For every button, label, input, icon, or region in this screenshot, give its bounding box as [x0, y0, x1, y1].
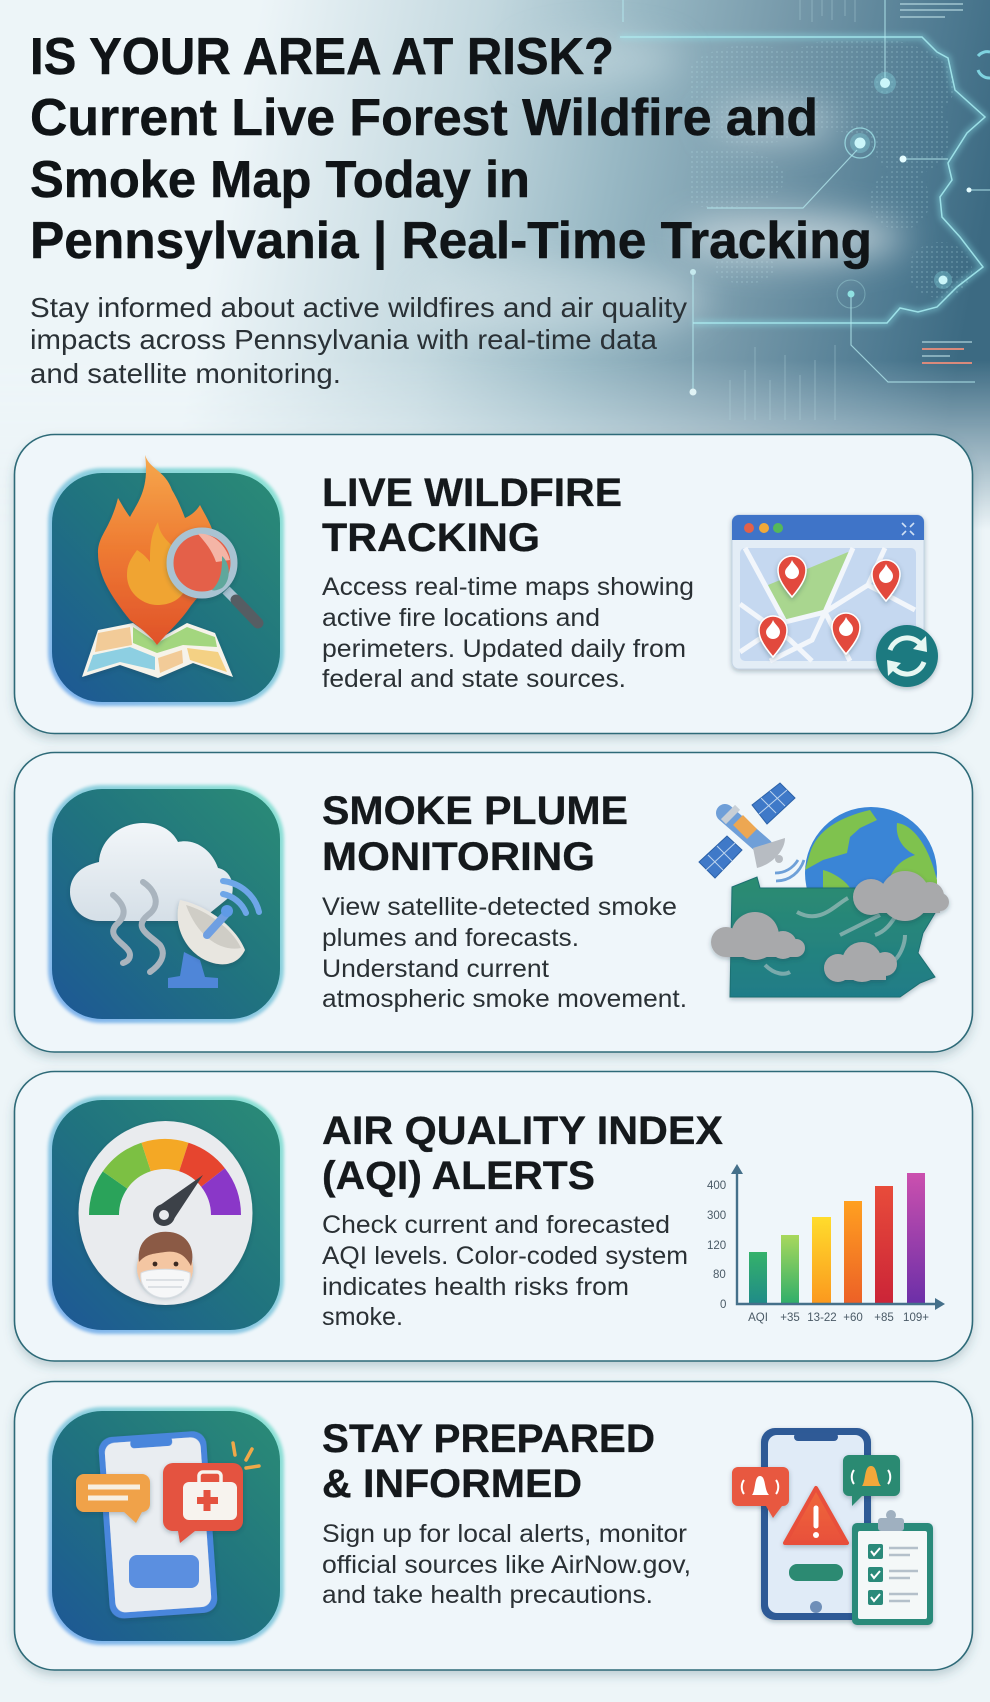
bar chart: AQI levels: 300 [707, 1210, 726, 1222]
subtitle: and satellite monitoring. [30, 358, 341, 389]
heading: stay prepared and informed: STAY PREPARED [322, 1417, 655, 1461]
body text: live wildfire tracking: Access real-time maps showing [322, 573, 694, 601]
icon: satellite, globe and Pennsylvania smoke map [699, 783, 949, 997]
subtitle: Stay informed about active wildfires and air quality [30, 292, 687, 323]
body text: air quality index alerts: AQI levels. Color-coded system [322, 1242, 688, 1270]
icon tile: phone with chat and first aid bubbles [48, 1407, 284, 1645]
bar chart: AQI levels: 0 [720, 1299, 726, 1311]
heading: smoke plume monitoring: SMOKE PLUME [322, 789, 628, 833]
heading: live wildfire tracking: LIVE WILDFIRE [322, 471, 622, 515]
icon: browser window with fire map [732, 515, 938, 687]
panel: live wildfire tracking [14, 434, 972, 734]
bar chart: AQI levels: 109+ [903, 1312, 929, 1324]
heading: stay prepared and informed [322, 1417, 655, 1506]
title: Pennsylvania | Real-Time Tracking [30, 212, 872, 270]
body text: live wildfire tracking: active fire locations and [322, 604, 600, 632]
heading: live wildfire tracking: TRACKING [322, 516, 540, 560]
subtitle: impacts across Pennsylvania with real-time data [30, 324, 657, 355]
body text: air quality index alerts: Check current and forecasted [322, 1211, 670, 1239]
bar chart: AQI levels: +85 [874, 1312, 894, 1324]
heading: air quality index alerts [322, 1109, 723, 1198]
body text: smoke plume monitoring: Understand current [322, 955, 549, 983]
bar chart: AQI levels: 80 [713, 1269, 726, 1281]
body text: air quality index alerts [322, 1211, 688, 1331]
body text: stay prepared and informed: official sources like AirNow.gov, [322, 1551, 691, 1579]
heading: smoke plume monitoring: MONITORING [322, 835, 595, 879]
panel: air quality index alerts [14, 1072, 972, 1361]
body text: smoke plume monitoring: plumes and forecasts. [322, 924, 579, 952]
body text: live wildfire tracking: federal and state sources. [322, 665, 626, 693]
heading: stay prepared and informed: & INFORMED [322, 1462, 582, 1506]
body text: smoke plume monitoring: View satellite-detected smoke [322, 893, 677, 921]
header background: digital map of Pennsylvania [236, 0, 990, 522]
body text: air quality index alerts: smoke. [322, 1303, 403, 1331]
bar chart: AQI levels: 13-22 [807, 1312, 837, 1324]
title: IS YOUR AREA AT RISK? [30, 28, 614, 86]
body text: smoke plume monitoring [322, 893, 687, 1013]
heading: air quality index alerts: AIR QUALITY INDEX [322, 1109, 723, 1153]
body text: stay prepared and informed [322, 1520, 691, 1609]
icon: phone with alerts and checklist [732, 1428, 933, 1625]
body text: air quality index alerts: indicates health risks from [322, 1273, 629, 1301]
bar chart: AQI levels: 120 [707, 1240, 726, 1252]
title [30, 28, 872, 270]
icon tile: cloud and radar dish [48, 785, 284, 1023]
body text: smoke plume monitoring: atmospheric smoke movement. [322, 985, 687, 1013]
bar chart: AQI levels: +35 [780, 1312, 800, 1324]
heading: air quality index alerts: (AQI) ALERTS [322, 1154, 595, 1198]
body text: live wildfire tracking [322, 573, 694, 693]
bar chart: AQI levels: AQI [748, 1312, 768, 1324]
heading: smoke plume monitoring [322, 789, 628, 879]
subtitle [30, 292, 687, 389]
bar chart: AQI levels: +60 [843, 1312, 863, 1324]
body text: live wildfire tracking: perimeters. Updated daily from [322, 635, 686, 663]
title: Current Live Forest Wildfire and [30, 89, 818, 147]
bar chart: AQI levels: 400 [707, 1180, 726, 1192]
body text: stay prepared and informed: and take health precautions. [322, 1581, 653, 1609]
heading: live wildfire tracking [322, 471, 622, 560]
body text: stay prepared and informed: Sign up for local alerts, monitor [322, 1520, 687, 1548]
bar chart: AQI levels [707, 1164, 945, 1324]
icon tile: AQI gauge and masked face [48, 1096, 284, 1334]
title: Smoke Map Today in [30, 151, 530, 209]
panel: smoke plume monitoring [14, 752, 972, 1052]
panel: stay prepared and informed [14, 1382, 972, 1670]
icon tile: flame, magnifier and map [48, 455, 284, 706]
